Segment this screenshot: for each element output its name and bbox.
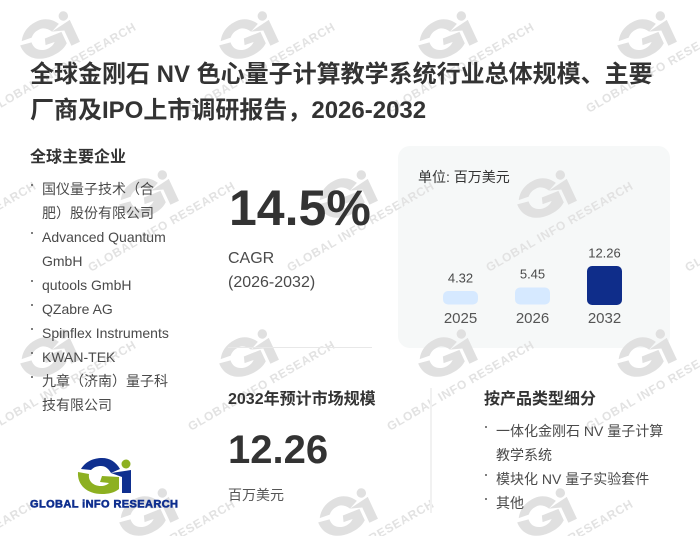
company list: Spinflex Instruments [42, 325, 169, 341]
product type list: 教学系统 [496, 447, 552, 463]
panel: global key companies [30, 148, 169, 413]
bar: 2025: 4.32 [448, 270, 473, 286]
background watermark pattern: GLOBAL INFO RESEARCH [186, 338, 337, 434]
stat: CAGR [228, 180, 371, 291]
market size value: 12.26 [228, 428, 328, 472]
market size heading: 2032年预计市场规模 [228, 391, 376, 408]
title: 厂商及IPO上市调研报告，2026-2032 [30, 97, 426, 124]
company list: Advanced Quantum [42, 229, 166, 245]
stat: 2032 market size [228, 390, 376, 503]
logo: Global Info Research: GLOBAL iNFO RESEARCH [30, 498, 178, 510]
bar: 2026: 2026 [516, 310, 549, 327]
bar: 2025: 2025 [444, 310, 477, 327]
bar: 2025 [443, 270, 478, 327]
bar: 2032: 12.26 [588, 246, 621, 260]
company list: 国仪量子技术（合 [42, 181, 154, 197]
product type list: 模块化 NV 量子实验套件 [496, 471, 649, 487]
background watermark pattern: GLOBAL INFO RESEARCH [284, 179, 436, 275]
product type list: 其他 [496, 495, 524, 511]
company list [31, 181, 169, 413]
panel: segmentation by product type [484, 390, 663, 511]
bar: 2032 [587, 246, 622, 327]
CAGR label [228, 250, 315, 291]
divider [228, 347, 372, 348]
company list: 九章（济南）量子科 [42, 373, 168, 389]
title [30, 61, 653, 124]
bar: 2032: 2032 [588, 310, 621, 327]
product type list [485, 423, 663, 511]
CAGR label: CAGR [228, 250, 274, 267]
logo: Global Info Research [30, 458, 178, 510]
divider [430, 388, 432, 513]
company list: GmbH [42, 253, 82, 269]
heading: global key companies: 全球主要企业 [30, 149, 126, 166]
CAGR value: 14.5% [229, 180, 371, 236]
company list: 肥）股份有限公司 [42, 205, 154, 221]
background watermark pattern: GLOBAL INFO RESEARCH [384, 20, 536, 116]
heading: by product type: 按产品类型细分 [484, 391, 596, 408]
background watermark pattern: GLOBAL INFO RESEARCH [484, 179, 635, 275]
background watermark pattern: GLOBAL INFO RESEARCH [186, 20, 337, 116]
background watermark pattern: GLOBAL INFO RESEARCH [86, 179, 237, 275]
CAGR label: (2026-2032) [228, 274, 315, 291]
background watermark pattern: GLOBAL INFO RESEARCH [384, 338, 536, 434]
market size unit: 百万美元 [228, 487, 284, 503]
bar: 2026: 5.45 [520, 266, 545, 282]
product type list: 一体化金刚石 NV 量子计算 [496, 423, 663, 439]
bar chart [443, 246, 622, 327]
unit label: 单位: 百万美元 [418, 169, 510, 185]
company list: QZabre AG [42, 301, 113, 317]
company list: 技有限公司 [42, 397, 112, 413]
panel: bar chart background [398, 146, 670, 348]
company list: qutools GmbH [42, 277, 131, 293]
company list: KWAN-TEK [42, 349, 115, 365]
bar: 2026 [515, 266, 550, 327]
title: 全球金刚石 NV 色心量子计算教学系统行业总体规模、主要 [30, 61, 653, 88]
